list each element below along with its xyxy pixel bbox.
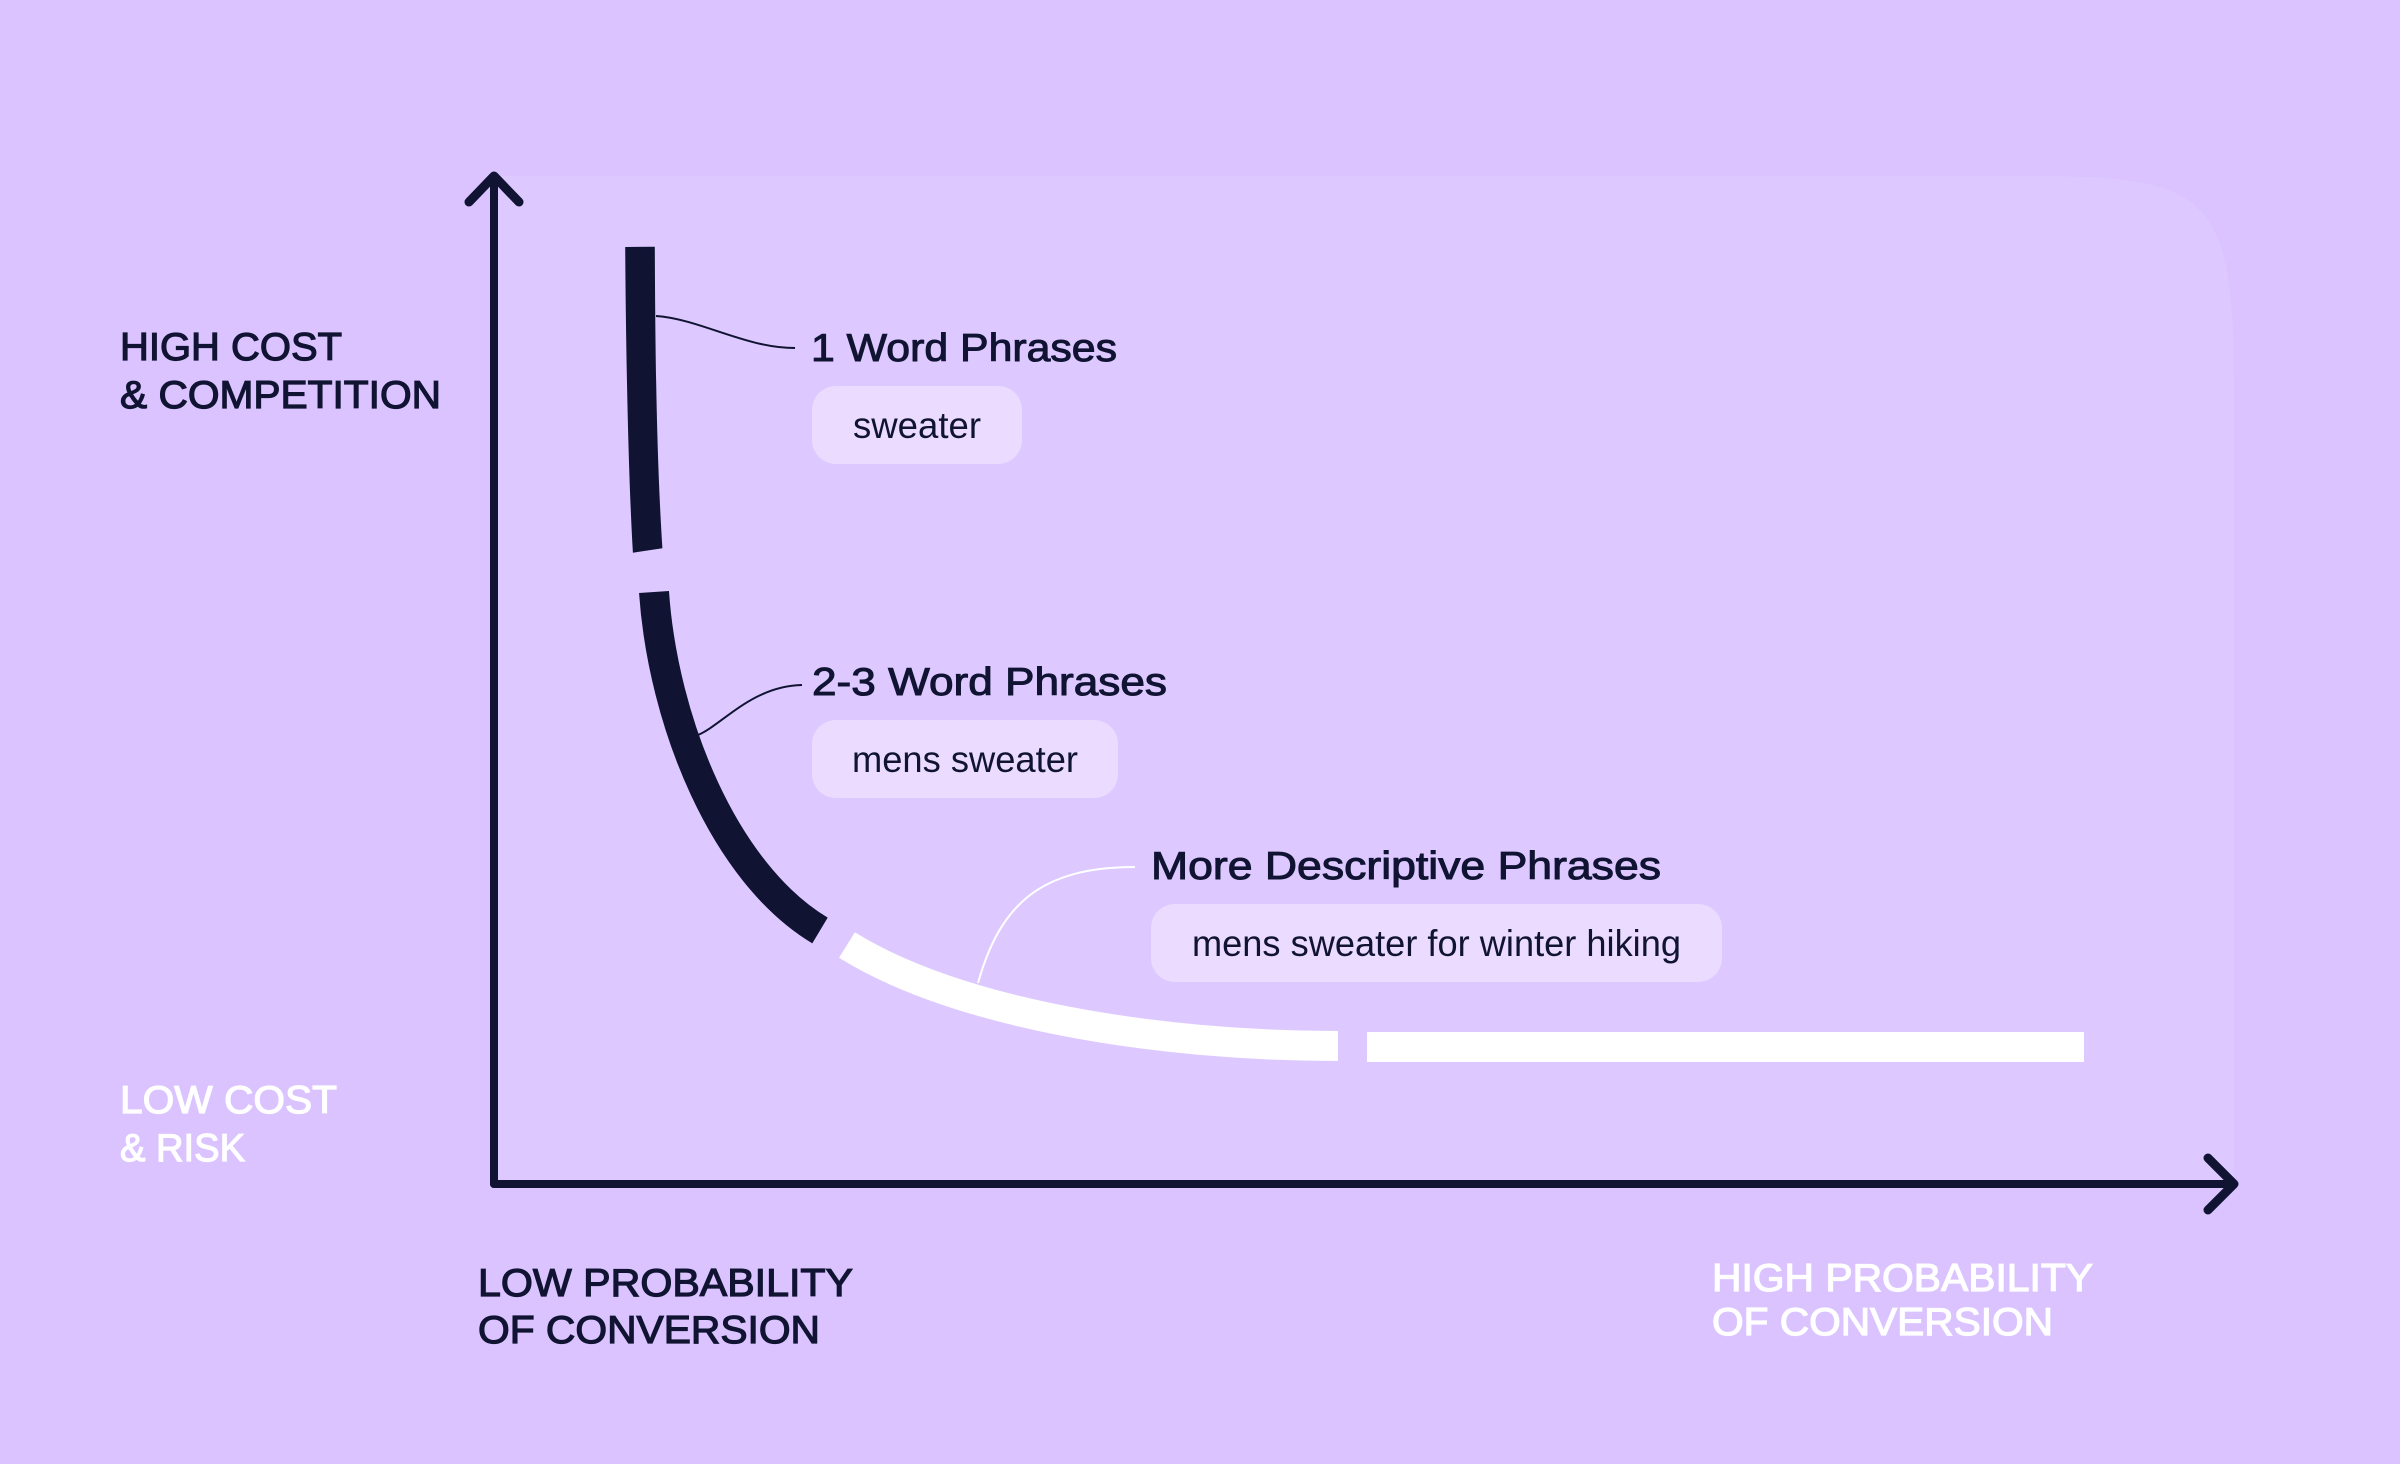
label: low probability of conversion: OF CONVERSION xyxy=(478,1309,820,1352)
connector: more descriptive phrases xyxy=(978,867,1135,983)
group: 1 word phrases xyxy=(811,327,1117,464)
heading: 1 word phrases: 1 Word Phrases xyxy=(811,327,1117,370)
heading: more descriptive phrases: More Descriptive Phrases xyxy=(1151,845,1661,888)
label: low cost and risk: & RISK xyxy=(120,1127,245,1170)
connector: 2-3 word phrases xyxy=(698,685,802,735)
example pill: mens sweater: mens sweater xyxy=(852,739,1078,780)
label: high probability of conversion: HIGH PROBABILITY xyxy=(1712,1257,2093,1300)
heading: 2-3 word phrases: 2-3 Word Phrases xyxy=(812,661,1167,704)
group: 2-3 word phrases xyxy=(812,661,1167,798)
panel: chart plot area xyxy=(494,176,2234,1184)
example pill: mens sweater for winter hiking: mens sweater for winter hiking xyxy=(1192,923,1681,964)
label: high cost and competition: HIGH COST xyxy=(120,326,342,369)
group: more descriptive phrases xyxy=(1151,845,1722,982)
connector: 1 word phrases xyxy=(656,316,795,348)
label: high probability of conversion: OF CONVERSION xyxy=(1712,1301,2053,1344)
label: low probability of conversion: LOW PROBABILITY xyxy=(478,1262,853,1305)
curve segment: more descriptive phrases xyxy=(847,945,1338,1046)
curve segment: 1 word phrases xyxy=(625,247,662,553)
example pill: sweater: sweater xyxy=(853,405,981,446)
label: low cost and risk: LOW COST xyxy=(120,1079,337,1122)
x axis arrow xyxy=(494,1158,2234,1210)
example pill: mens sweater xyxy=(812,720,1118,798)
curve segment: flat tail xyxy=(1367,1032,2084,1062)
example pill: sweater xyxy=(812,386,1022,464)
label: high cost and competition: & COMPETITION xyxy=(120,374,441,417)
example pill: mens sweater for winter hiking xyxy=(1151,904,1722,982)
curve segment: 2-3 word phrases xyxy=(654,592,820,930)
y axis arrow xyxy=(469,176,519,1184)
